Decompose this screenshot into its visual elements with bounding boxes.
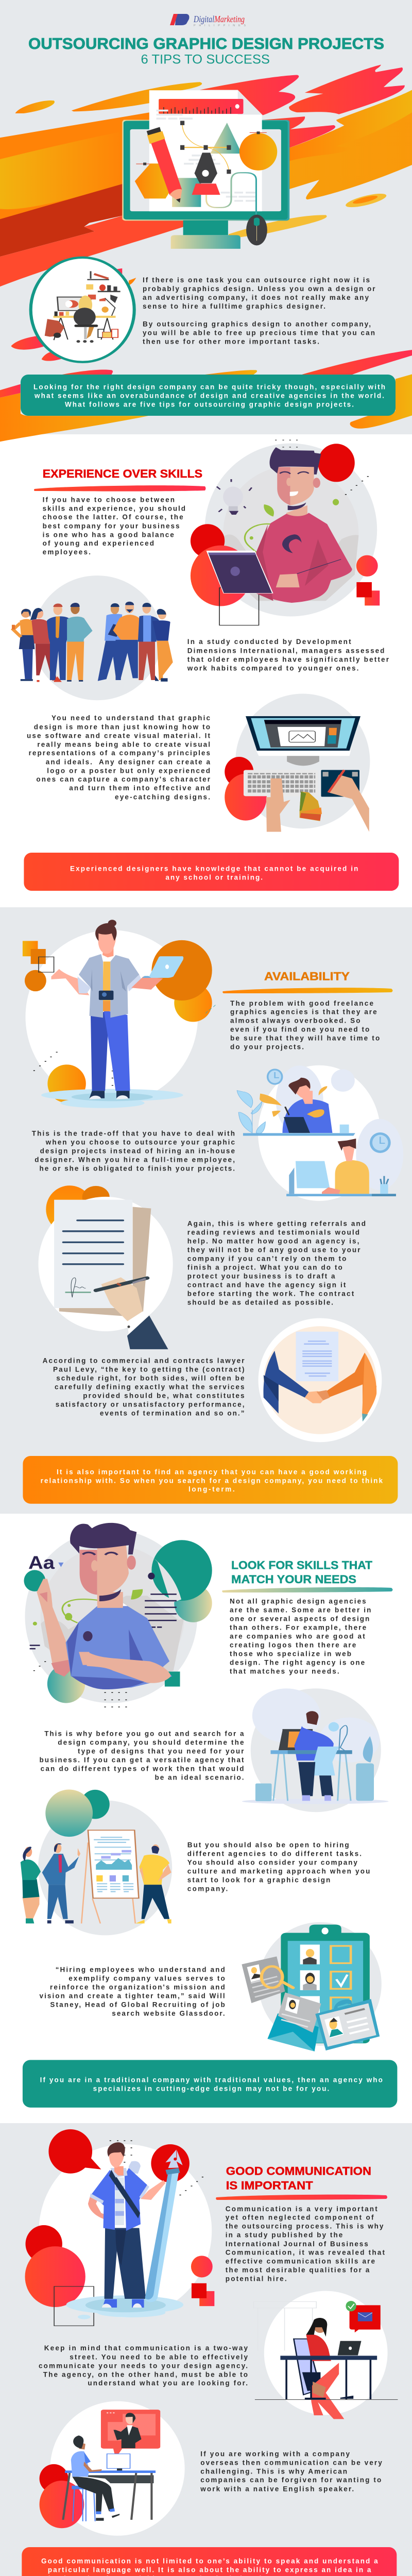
tip 2 text: contract: protect your business is to draft a (187, 1273, 335, 1280)
callout: looking for the right company (21, 375, 396, 416)
illustration: handshake with document (259, 1318, 382, 1442)
type specimen letters: Aa (28, 1553, 55, 1573)
title (28, 35, 384, 67)
tip 3 text: determine design types: can do different types of work then that would (41, 1765, 244, 1772)
tip 4 text: overseas: companies can be forgiven for wanting to (200, 2476, 381, 2484)
heading: look for skills that match your needs: MATCH YOUR NEEDS (231, 1573, 356, 1586)
callout: good communication: particular language well. It is also about the ability to express an idea in a (48, 2566, 371, 2574)
tip 3 text: determine design types (39, 1730, 244, 1782)
callout: traditional company (23, 2060, 397, 2108)
callout: looking for the right company: what seems like an overabundance of design and creative agencies in the world. (34, 392, 384, 400)
heading: look for skills that match your needs: LOOK FOR SKILLS THAT (231, 1558, 373, 1571)
logo: Digital Marketing Philippines (top) (170, 14, 246, 27)
callout: experienced designers (24, 853, 399, 891)
heading: availability: AVAILABILITY (264, 970, 350, 983)
person two (30, 608, 62, 682)
tip 2 text: contract (187, 1220, 366, 1306)
tip 3 text: open to different agencies: But you should also be open to hiring (187, 1841, 349, 1849)
tip 2 text: trade-off: he or she is obligated to finish your projects. (39, 1164, 235, 1173)
callout: experienced designers: any school or training. (165, 874, 263, 882)
tip 2 text: contract: before starting the work. The contract (187, 1290, 354, 1298)
tip 1 text: study: Dimensions International, managers assessed (187, 647, 384, 654)
tip 1 text: beyond software: use software and create visual material. It (27, 732, 210, 739)
heading: look for skills that match your needs (222, 1558, 392, 1592)
intro text: an advertising company, it does not really make any (143, 294, 369, 301)
tip 3 text: open to different agencies: start to look for a graphic design (187, 1876, 330, 1884)
tip 1 text: study: In a study conducted by Development (187, 638, 351, 646)
tip 3 text: open to different agencies: You should also consider your company (187, 1859, 357, 1867)
tip 2 text: contract: contract and have the agency sign it (187, 1281, 346, 1289)
person five (98, 603, 122, 681)
person six (113, 602, 147, 680)
callout: looking for the right company: Looking for the right design company can be quite tricky though, especially with (33, 383, 385, 391)
tip 3 text: not all agencies the same: are the same. Some are better in (230, 1606, 371, 1614)
intro illustration: circular badge with woman at desk (11, 258, 136, 362)
person eight (152, 609, 173, 682)
callout: traditional company: specializes in cutting-edge design may not be for you. (93, 2084, 329, 2092)
tip 1 text: study (187, 638, 389, 672)
tip 3 text: determine design types: This is why before you go out and search for a (44, 1730, 244, 1738)
tip 4 text: overseas: work with a native English speaker. (200, 2485, 354, 2493)
tip 2 text: overbooked: graphics agencies is that they are (230, 1008, 377, 1016)
illustration: designer desktop with hands and colour fan (225, 694, 370, 832)
tip 3 text: not all agencies the same: than others. For example, there (230, 1624, 367, 1631)
swooshes behind intro callout (0, 350, 412, 442)
tip 2 text: contract: reading reviews and testimonials would (187, 1228, 359, 1236)
tip 1 text: beyond software: design is more than just knowing how to (34, 723, 210, 731)
tip 1 text: beyond software: representations of a company’s principles (29, 749, 210, 757)
tip 3 text: Glassdoor quote: “Hiring employees who understand and (56, 1966, 225, 1974)
tip 2 text: contract: finish a project. What you can do to (187, 1264, 342, 1272)
man in yellow shirt (135, 1844, 171, 1923)
tip 1 text: beyond software (27, 714, 211, 801)
tip 2 text: overbooked: even if you find one you need to (230, 1026, 369, 1033)
tip 1 text: beyond software: eye-catching designs. (115, 793, 210, 801)
tip 3 text: not all agencies the same: that matches your needs. (230, 1667, 339, 1675)
heading: good communication is important: IS IMPORTANT (226, 2179, 313, 2192)
title: OUTSOURCING GRAPHIC DESIGN PROJECTS (28, 35, 384, 53)
intro text: probably graphics design. Unless you own a design or (143, 285, 375, 293)
illustration: designer at drafting desk (242, 1688, 389, 1812)
tip 1 text: choose experience: choose the latter. Of course, the (43, 513, 183, 521)
callout: good working relationship: long-term. (188, 1485, 235, 1493)
person four (67, 603, 93, 682)
heading: availability (222, 970, 392, 993)
illustration: hand signing a contract (38, 1185, 173, 1349)
illustration: team presenting at a flip chart (21, 1789, 172, 1935)
tip 2 text: overbooked: do your projects. (230, 1043, 304, 1051)
tip 2 illustration: two freelancers at desks (237, 1065, 403, 1201)
tip 2 text: quote by Paul Levy: According to commercial and contracts lawyer (43, 1357, 245, 1364)
tip 4 text: neglected component: the most desirable qualities for a (226, 2266, 370, 2274)
tip 4 text: neglected component: Communication is a very important (226, 2205, 377, 2213)
intro text: sense to hire a fulltime graphics designer. (143, 302, 325, 310)
intro text (143, 276, 375, 345)
tip 4 text: overseas: If you are working with a company (200, 2450, 350, 2458)
tip 4 text: two-way street: understand what you are looking for. (88, 2379, 248, 2387)
hero illustration: design monitor with paint swooshes (0, 64, 412, 286)
tip 4 text: neglected component: Communication, it was revealed that (226, 2248, 385, 2257)
intro text: By outsourcing graphics design to another company, (143, 320, 371, 328)
tip 3 text: Glassdoor quote: vision and create a tighter team,” said Will (39, 1992, 225, 2000)
tip 2 text: quote by Paul Levy: carefully defining exactly what the services (55, 1383, 245, 1391)
illustration: clipboard with CV profiles (242, 1922, 382, 2052)
tip 3 text: open to different agencies: company. (187, 1885, 228, 1893)
callout: good communication: Good communication is not limited to one’s ability to speak and understand a (41, 2557, 378, 2565)
tip 2 text: trade-off: This is the trade-off that you have to deal with (32, 1129, 235, 1138)
tip 1 text: beyond software: really means being able to create visual (37, 741, 210, 748)
tip 1 text: beyond software: and turn them into effective and (69, 784, 210, 792)
tip 2 text: contract: help. No matter how good an agency is, (187, 1238, 359, 1245)
tip 1 text: study: work habits compared to younger ones. (187, 665, 358, 672)
tip 4 text: neglected component: potential hire. (226, 2275, 287, 2282)
callout: looking for the right company: What follows are five tips for outsourcing graphic design projects. (65, 400, 354, 408)
logo: Digital Marketing Philippines (top): PHILIPPINES (194, 24, 246, 27)
tip 1 text: choose experience: skills and experience, you should (43, 505, 185, 512)
tip 2 text: trade-off: designer. When you hire a full-time employee, (35, 1156, 235, 1163)
tip 2 text: overbooked: be sure that they will have time to (230, 1035, 380, 1042)
tip 3 text: open to different agencies: culture and marketing approach when you (187, 1867, 370, 1875)
tip 3 text: determine design types: type of designs that you need for your (78, 1748, 244, 1755)
intro text: you will be able to free up precious time that you can (143, 329, 375, 337)
intro text: If there is one task you can outsource right now it is (143, 276, 370, 284)
tip 2 illustration: standing photographer with laptop (23, 920, 215, 1108)
illustration: team of eight people (12, 575, 173, 700)
tip 3 text: not all agencies the same: those who specialize in web (230, 1650, 351, 1657)
tip 4 text: two-way street: Keep in mind that communication is a two-way (44, 2344, 248, 2352)
tip 3 illustration: thoughtful man with Aa type (24, 1523, 212, 1707)
person seven (138, 603, 159, 680)
tip 4 text: two-way street (39, 2344, 248, 2387)
callout: good working relationship (23, 1456, 398, 1504)
tip 3 text: not all agencies the same: Not all graphic design agencies (230, 1597, 366, 1605)
tip 4 text: two-way street: The agency, on the other hand, must be able to (43, 2371, 248, 2378)
illustration: woman emailing at desk (253, 2291, 398, 2419)
tip 2 text: overbooked (230, 999, 380, 1051)
heading: good communication is important: GOOD COMMUNICATION (226, 2165, 371, 2178)
tip 3 text: Glassdoor quote: Staney, Head of Global Recruiting of job (50, 2001, 225, 2009)
tip 2 text: trade-off: design projects instead of hiring an in-house (40, 1147, 235, 1155)
tip 4 text: two-way street: street. You need to be able to effectively (70, 2353, 248, 2361)
tip 4 text: overseas: challenging. This is why American (200, 2468, 347, 2475)
tip 3 text: Glassdoor quote: reinforce the organization's mission and (50, 1984, 225, 1991)
heading: good communication is important (216, 2165, 387, 2200)
tip 4 text: neglected component (226, 2205, 385, 2282)
tip 2 text: contract: they will not be of any good use to your (187, 1246, 360, 1254)
heading: experience over skills: EXPERIENCE OVER SKILLS (43, 467, 202, 480)
person one (12, 608, 38, 681)
tip 1 text: study: that older employees have significantly better (187, 655, 389, 663)
callout: good communication (22, 2547, 397, 2576)
tip 4 text: neglected component: the outsourcing process. This is why (226, 2223, 384, 2230)
callout: traditional company: If you are in a traditional company with traditional values, then an agency who (40, 2076, 383, 2083)
tip 4 text: overseas (200, 2450, 382, 2493)
tip 3 text: not all agencies the same: one or several aspects of design (230, 1615, 369, 1622)
callout: experienced designers: Experienced designers have knowledge that cannot be acquired in (70, 865, 358, 873)
tip 4 text: two-way street: communicate your needs to your design agency. (39, 2362, 248, 2369)
illustration: video call at desk (40, 2401, 185, 2536)
tip 3 text: Glassdoor quote (39, 1966, 225, 2017)
tip 4 text: neglected component: yet often neglected component of (226, 2213, 374, 2222)
tip 4 text: neglected component: International Journal of Business (226, 2240, 368, 2248)
heading: experience over skills (34, 467, 206, 492)
person three (47, 603, 75, 680)
tip 1 text: beyond software: and ideals. Any designer can create a (46, 758, 210, 766)
tip 2 text: overbooked: The problem with good freelance (230, 999, 373, 1007)
tip 1 illustration: man holding tablet (191, 440, 380, 625)
tip 2 text: quote by Paul Levy: schedule right, for both sides, will often be (56, 1374, 245, 1382)
tip 2 text: quote by Paul Levy: Paul Levy, “the key to getting the (contract) (53, 1365, 244, 1374)
tip 3 text: determine design types: design company, you should determine the (58, 1739, 244, 1747)
tip 1 text: beyond software: You need to understand that graphic (52, 714, 210, 722)
man in suit (42, 1843, 80, 1923)
tip 3 text: determine design types: business. If you can get a versatile agency that (39, 1756, 244, 1764)
tip 3 text: Glassdoor quote: exemplify company values serves to (68, 1975, 225, 1982)
tip 3 text: not all agencies the same: are companies who are good at (230, 1632, 365, 1640)
tip 2 text: trade-off: when you choose to outsource your graphic (45, 1139, 235, 1146)
tip 3 text: not all agencies the same: creating logos then there are (230, 1641, 356, 1649)
tip 2 text: quote by Paul Levy: provided should be, what constitutes (83, 1392, 244, 1399)
tip 4 illustration: man with giant pen (25, 2129, 214, 2326)
tip 2 text: quote by Paul Levy: events of termination and so on.” (100, 1409, 244, 1417)
woman presenter listener (21, 1846, 41, 1923)
title: 6 TIPS TO SUCCESS (141, 53, 270, 67)
callout: good working relationship: relationship with. So when you search for a design company, you need to think (41, 1477, 383, 1484)
tip 2 text: contract: company if you can’t rely on them to (187, 1255, 346, 1263)
tip 3 text: not all agencies the same (230, 1597, 371, 1675)
tip 1 text: beyond software: logo or a poster but only experienced (47, 767, 210, 774)
callout: good working relationship: It is also important to find an agency that you can have a good working (57, 1468, 367, 1476)
tip 1 text: choose experience (43, 496, 185, 556)
tip 3 text: open to different agencies (187, 1841, 370, 1893)
logo: Digital Marketing Philippines (top): Marketing (214, 14, 245, 24)
intro text: then use for other more important tasks. (143, 338, 319, 345)
tip 1 text: beyond software: ones can capture a company's character (36, 775, 211, 783)
tip 4 text: neglected component: in a study published by the (226, 2231, 343, 2239)
tip 2 text: quote by Paul Levy (43, 1357, 245, 1417)
tip 3 text: determine design types: be an ideal scenario. (154, 1773, 244, 1782)
tip 4 text: neglected component: effective communication skills are (226, 2258, 375, 2265)
tip 4 text: overseas: overseas then communication can be very (200, 2459, 382, 2466)
logo: Digital Marketing Philippines (top): Digital (193, 14, 214, 24)
tip 2 text: contract: Again, this is where getting referrals and (187, 1220, 366, 1228)
tip 1 text: choose experience: is one who has a good balance (43, 531, 174, 538)
tip 2 text: contract: should be as detailed as possible. (187, 1298, 333, 1306)
tip 1 text: choose experience: employees. (43, 548, 91, 556)
tip 2 text: trade-off (32, 1129, 235, 1173)
tip 1 text: choose experience: If you have to choose between (43, 496, 175, 503)
tip 3 text: not all agencies the same: design. The right agency is one (230, 1659, 365, 1666)
tip 1 text: choose experience: of young and experienced (43, 539, 154, 547)
tip 3 text: open to different agencies: different agencies to do different tasks. (187, 1850, 362, 1858)
tip 2 text: overbooked: almost always overbooked. So (230, 1017, 360, 1025)
tip 3 text: Glassdoor quote: search website Glassdoor. (112, 2009, 225, 2017)
tip 1 text: choose experience: best company for your business (43, 522, 180, 530)
tip 2 text: quote by Paul Levy: satisfactory or unsatisfactory performance, (56, 1400, 244, 1409)
